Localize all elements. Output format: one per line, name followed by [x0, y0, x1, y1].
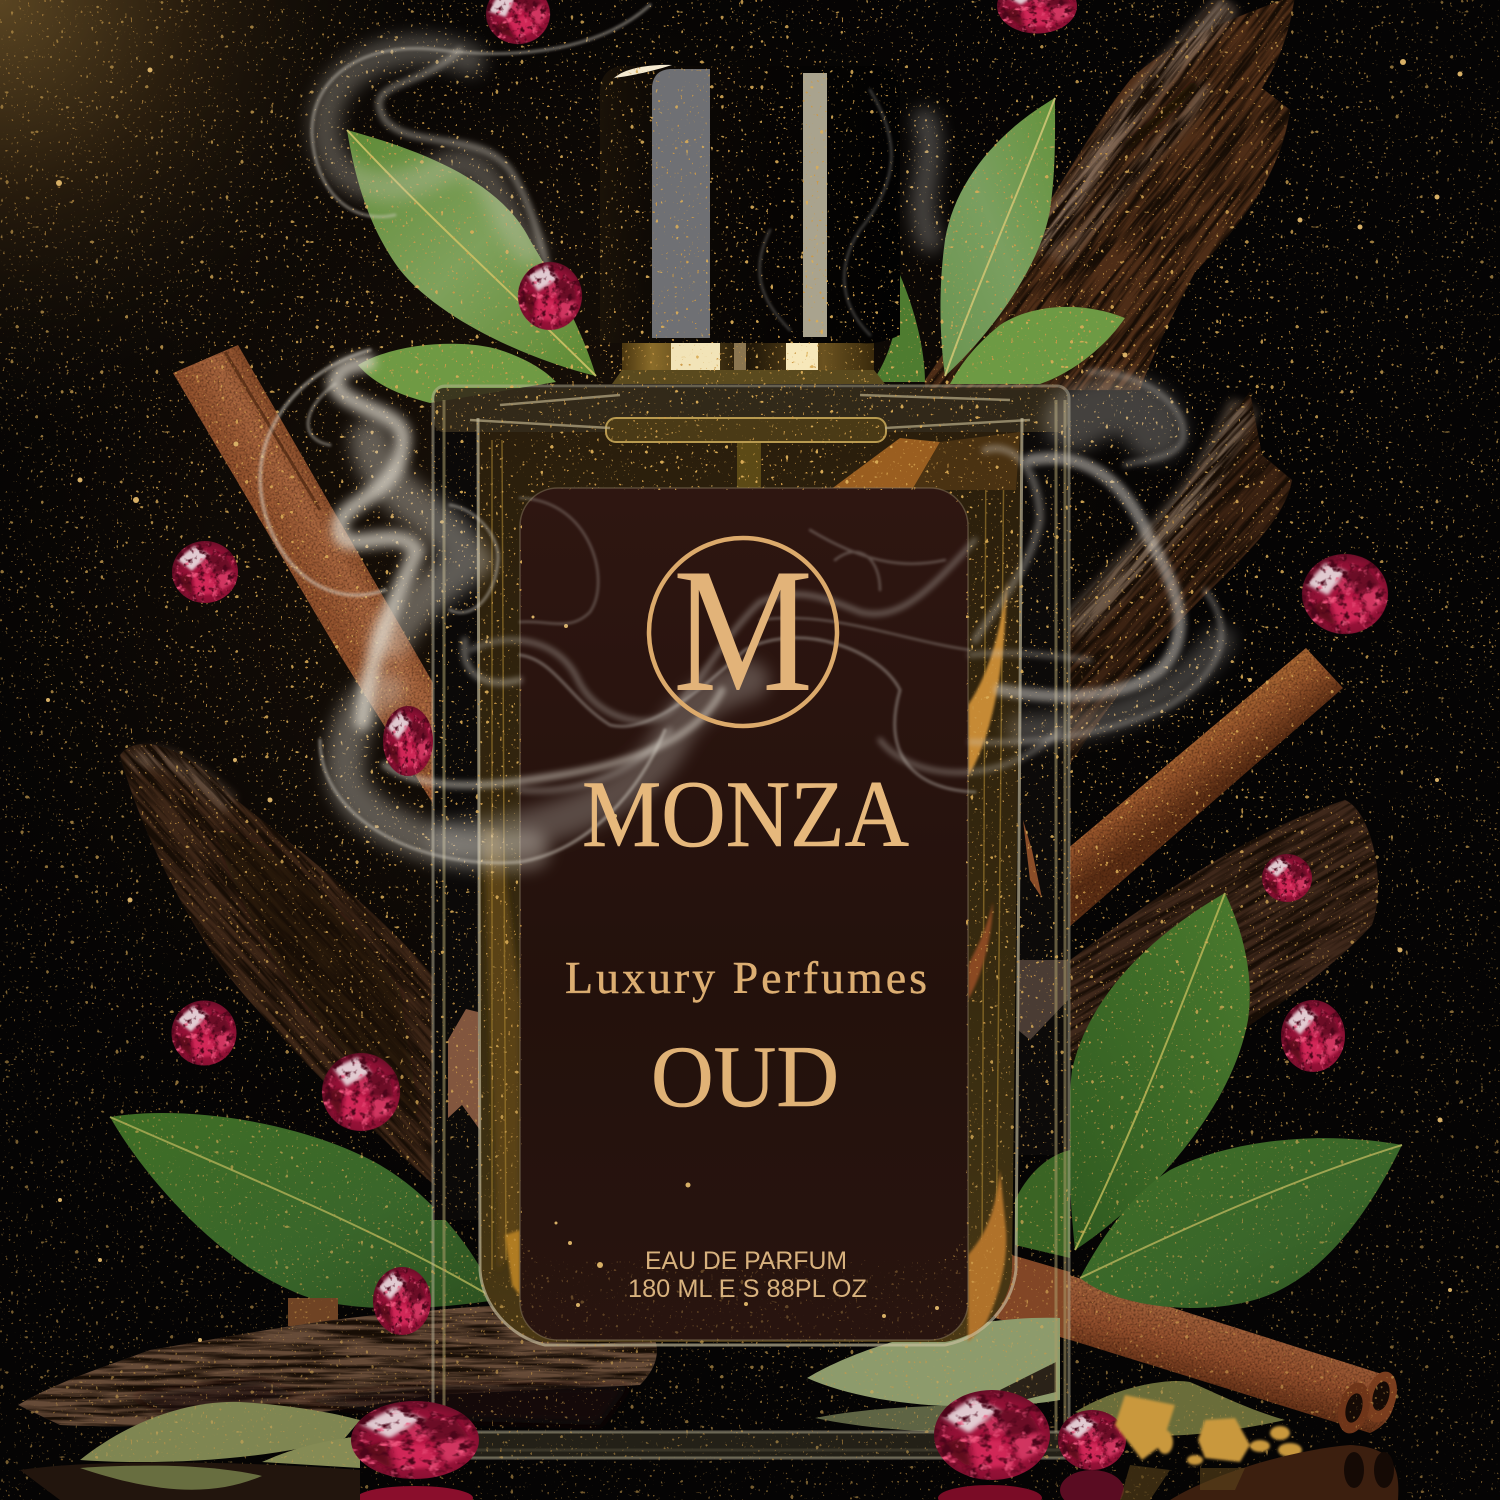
leaf: top left large [347, 130, 596, 376]
gem: by bottle base left [373, 1267, 431, 1335]
volume: 180 ML E S 88PL OZ [628, 1275, 867, 1303]
reflection on table [20, 1445, 1398, 1500]
glass inner edge [478, 418, 1022, 1345]
leaf: top right small [950, 307, 1125, 384]
dark wedge on seen-through leaf [1000, 1362, 1056, 1402]
bottle collar [612, 340, 885, 384]
shoulder glass [434, 388, 1068, 432]
smoke: over cap [760, 90, 930, 335]
gem: lower right [1281, 1000, 1345, 1072]
gem: base right small [1058, 1410, 1126, 1470]
liquid body [478, 432, 1022, 1342]
smoke: right ring [880, 372, 1222, 772]
smoke: top left plume [312, 5, 650, 270]
right lower wood streak [968, 902, 993, 1000]
scent name: OUD [651, 1029, 839, 1126]
right clear glass gap [1018, 430, 1070, 1155]
left amber pool [505, 1230, 520, 1296]
bottle [433, 386, 1070, 1458]
base thickness lines [436, 1432, 1068, 1458]
cap beige reflection [803, 73, 827, 337]
glass side: leaf seen through [1015, 1150, 1070, 1258]
wood: right middle chunk [867, 277, 1485, 895]
refracted wood in right gap [1018, 960, 1068, 1040]
cinnamon stick: left [173, 345, 440, 815]
neck seat [606, 418, 886, 442]
wood: left chunk [0, 585, 662, 1349]
brand name: MONZA [582, 761, 909, 867]
glass side: cinnamon seen through [995, 1250, 1070, 1340]
smoke [260, 5, 1222, 863]
leaf: behind cap [872, 275, 925, 382]
wood: top right chunk [733, 0, 1487, 570]
bottle label [520, 488, 968, 1340]
leaf: bottom right wide [1080, 1138, 1402, 1308]
product type: EAU DE PARFUM [645, 1247, 847, 1275]
tagline: Luxury Perfumes [565, 952, 927, 1003]
right amber flame [968, 580, 1007, 777]
glass wall lines left [444, 400, 1065, 1450]
gem: lower left large [313, 1044, 409, 1140]
gem: right small [1262, 854, 1312, 902]
gem: on top leaf [511, 254, 589, 338]
left clear glass gap [433, 430, 480, 1220]
bottle cap [600, 65, 900, 343]
wood: right lower chunk [933, 658, 1495, 1212]
wood: bottom left log [18, 1305, 657, 1426]
amber crystals [1115, 1395, 1302, 1465]
right amber pool [968, 1170, 1006, 1342]
amber tint top right [912, 432, 1020, 490]
cap grey reflection [652, 69, 710, 338]
smoke: across label [450, 498, 975, 840]
leaf: bottom left large [110, 1113, 497, 1308]
base highlight lines [436, 1432, 1068, 1458]
gem: top [477, 0, 559, 52]
cap top highlight [614, 65, 672, 78]
gem: left [172, 541, 238, 603]
gem: top right [997, 0, 1077, 34]
refracted cinnamon in right gap [1023, 820, 1042, 898]
gem: right [1295, 548, 1395, 640]
gem: base left [351, 1401, 479, 1479]
dip tube [737, 440, 761, 490]
wood through liquid top [830, 438, 940, 490]
smoke: left column and ring [260, 350, 722, 863]
gem: left of bottle [383, 706, 433, 776]
dry leaf: bottom right [1075, 1381, 1285, 1436]
cinnamon stick: bottom right [990, 1250, 1402, 1437]
gem: lower left [172, 1000, 236, 1066]
leaf: top left small [358, 344, 556, 403]
leaf: top right tall [940, 98, 1055, 376]
shoulder highlights [470, 395, 1030, 428]
dry leaf: bottom left small [262, 1436, 360, 1468]
stub behind log [288, 1298, 338, 1326]
left liquid gold streaks [484, 830, 520, 1270]
dry leaf seen through base [807, 1318, 1060, 1407]
liquid gold lines [492, 440, 1004, 1270]
cinnamon stick: right [1060, 648, 1343, 935]
refracted cinnamon in left gap [448, 1009, 480, 1130]
glass outline [433, 386, 1069, 1450]
leaf: bottom right tall [1069, 893, 1250, 1250]
dry leaf: bottom left [80, 1402, 360, 1462]
label logo: circle monogram: M [673, 531, 813, 729]
dry leaf seen through base lower [815, 1406, 1040, 1433]
gem: base right large [934, 1390, 1050, 1480]
